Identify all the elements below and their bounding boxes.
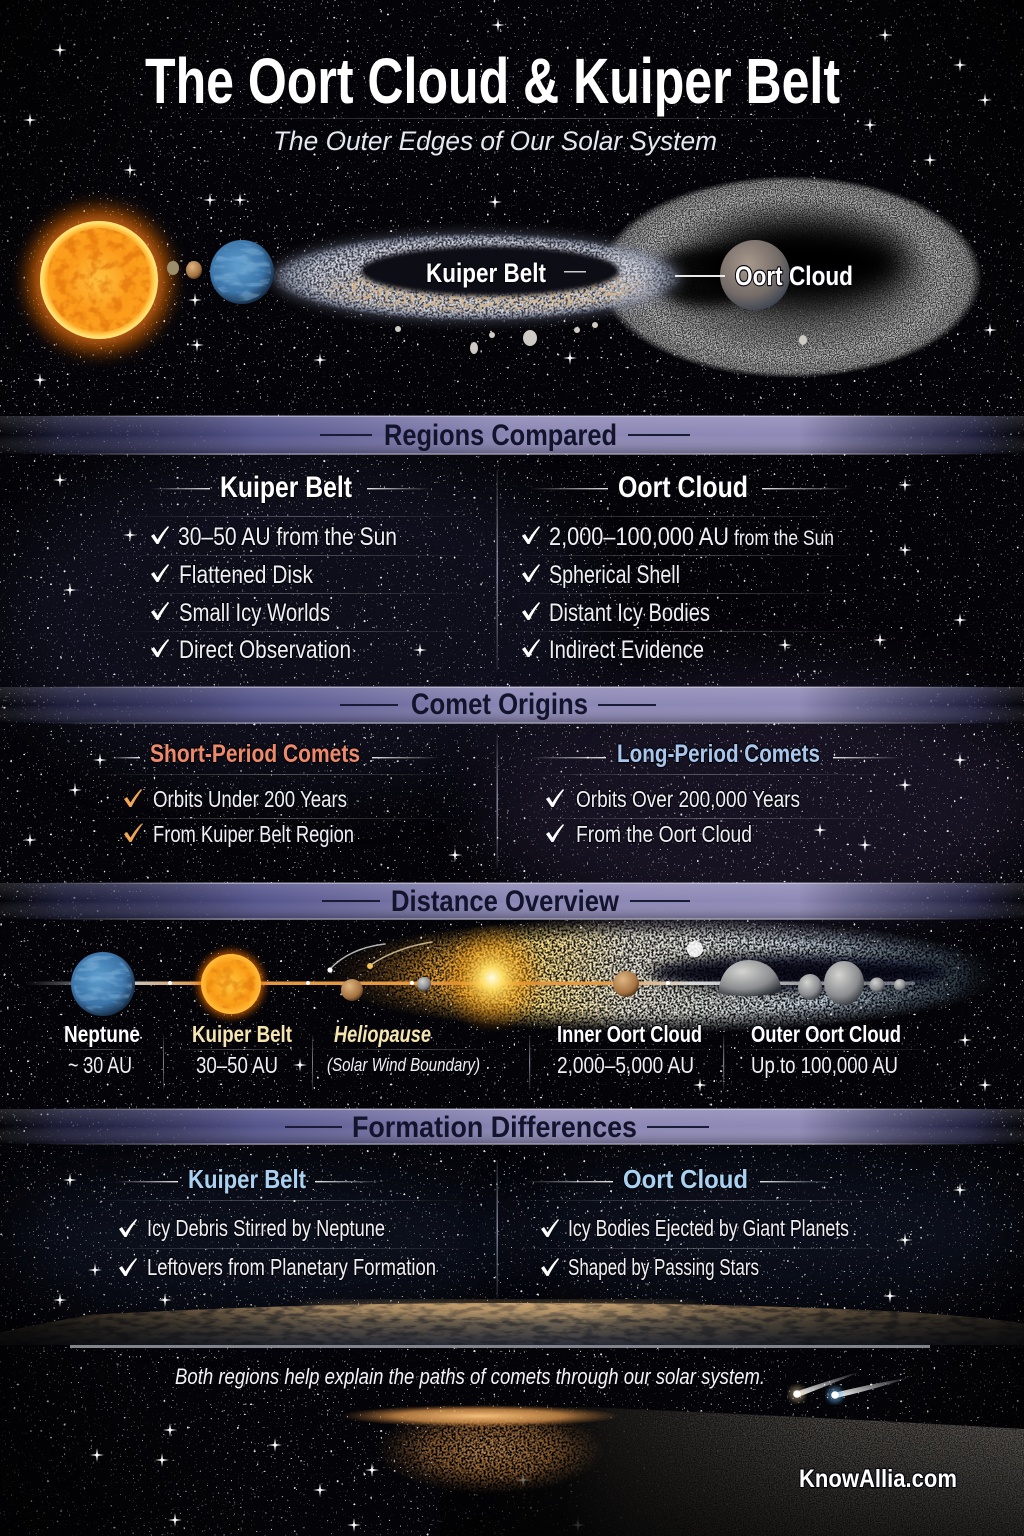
list xyxy=(151,523,397,664)
label: heliopause: Heliopause xyxy=(334,1021,431,1047)
label: outer oort cloud xyxy=(751,1021,901,1078)
icon: rocks near heliopause xyxy=(341,977,431,1001)
section band: regions compared: Regions Compared xyxy=(384,419,617,452)
label: kuiper belt: Kuiper Belt xyxy=(426,258,546,288)
kuiper belt ring xyxy=(272,233,682,321)
section band: comet origins: Comet Origins xyxy=(411,688,588,721)
list: 30–50 AU from the Sun xyxy=(178,523,397,551)
icon: neptune xyxy=(71,952,135,1016)
heading: Short-Period Comets xyxy=(150,740,360,768)
list xyxy=(541,1215,849,1280)
panel: kuiper belt regions xyxy=(120,471,480,664)
list: Shaped by Passing Stars xyxy=(568,1254,759,1280)
icon: inner oort planet xyxy=(613,971,639,997)
label: kuiper belt: Kuiper Belt xyxy=(192,1021,292,1047)
list: Indirect Evidence xyxy=(549,636,704,664)
label: heliopause xyxy=(327,1021,480,1075)
section band: comet origins xyxy=(0,686,1024,724)
section band: formation differences xyxy=(0,1108,1024,1145)
label: inner oort cloud xyxy=(557,1021,702,1078)
icon: comets xyxy=(789,1371,912,1403)
list: From Kuiper Belt Region xyxy=(153,821,354,847)
label: heliopause: (Solar Wind Boundary) xyxy=(327,1055,480,1075)
list xyxy=(119,1215,436,1280)
list: Small Icy Worlds xyxy=(179,599,330,627)
list: Distant Icy Bodies xyxy=(549,599,710,627)
list: From the Oort Cloud xyxy=(576,821,752,847)
label: oort cloud: Oort Cloud xyxy=(735,261,853,291)
horizon planet xyxy=(0,1303,1024,1348)
icon: oort planet xyxy=(720,240,790,310)
scale line xyxy=(25,982,915,985)
icon: outer oort bodies xyxy=(718,960,906,1005)
divider: regions columns xyxy=(496,470,498,670)
list: Icy Debris Stirred by Neptune xyxy=(147,1215,385,1241)
section band: distance overview: Distance Overview xyxy=(391,885,620,918)
section band: distance overview xyxy=(0,882,1024,920)
brand: KnowAllia.com xyxy=(799,1465,957,1493)
list: Orbits Under 200 Years xyxy=(153,786,347,812)
icon: small planets xyxy=(167,261,202,279)
panel: long-period comets xyxy=(515,740,901,847)
subtitle: The Outer Edges of Our Solar System xyxy=(273,126,717,156)
list: Icy Bodies Ejected by Giant Planets xyxy=(568,1215,849,1241)
section band: formation differences: Formation Differences xyxy=(352,1111,637,1144)
section band: regions compared xyxy=(0,416,1024,455)
list xyxy=(546,786,800,847)
label: inner oort cloud: Inner Oort Cloud xyxy=(557,1021,702,1047)
heading: Long-Period Comets xyxy=(617,740,820,768)
heading: Oort Cloud xyxy=(623,1164,748,1194)
divider: comet columns xyxy=(496,735,498,868)
panel: oort cloud regions xyxy=(505,471,865,664)
chart: distance scale xyxy=(30,920,990,1032)
icon: sun xyxy=(17,198,181,362)
panel: short-period comets xyxy=(90,740,470,847)
list xyxy=(124,786,354,847)
list: Spherical Shell xyxy=(549,561,680,589)
hero illustration: solar system xyxy=(17,176,982,378)
particle belt xyxy=(332,920,990,1032)
label: kuiper belt: 30–50 AU xyxy=(196,1052,278,1078)
lower planet xyxy=(340,1405,1024,1536)
icon: kuiper belt sun xyxy=(193,946,269,1022)
label: outer oort cloud: Up to 100,000 AU xyxy=(751,1052,898,1078)
scattered rocks xyxy=(395,322,807,354)
marker dots xyxy=(168,941,703,985)
panel: kuiper belt formation xyxy=(85,1164,475,1280)
list: Flattened Disk xyxy=(179,561,313,589)
label: neptune: Neptune xyxy=(64,1021,140,1047)
list: Leftovers from Planetary Formation xyxy=(147,1254,436,1280)
list: from the Sun xyxy=(734,527,834,550)
icon: comets xyxy=(327,942,432,973)
label: inner oort cloud: 2,000–5,000 AU xyxy=(557,1052,694,1078)
closing statement: Both regions help explain the paths of comets through our solar system. xyxy=(175,1364,765,1389)
label: kuiper belt xyxy=(192,1021,292,1078)
list: Direct Observation xyxy=(179,636,351,664)
heading: Kuiper Belt xyxy=(188,1164,306,1194)
heading: Oort Cloud xyxy=(618,471,748,504)
distance labels xyxy=(55,1021,935,1090)
label: neptune: ~ 30 AU xyxy=(68,1052,132,1078)
label: neptune xyxy=(64,1021,140,1078)
list: 2,000–100,000 AU xyxy=(549,523,729,551)
list xyxy=(522,523,834,664)
icon: neptune xyxy=(210,240,274,304)
oort cloud shell xyxy=(598,176,982,378)
title: The Oort Cloud & Kuiper Belt xyxy=(145,45,840,117)
divider: formation columns xyxy=(496,1160,498,1298)
list: Orbits Over 200,000 Years xyxy=(576,786,800,812)
panel: oort cloud formation xyxy=(510,1164,900,1280)
label: outer oort cloud: Outer Oort Cloud xyxy=(751,1021,901,1047)
icon: heliopause flare xyxy=(437,923,547,1033)
heading: Kuiper Belt xyxy=(220,471,352,504)
